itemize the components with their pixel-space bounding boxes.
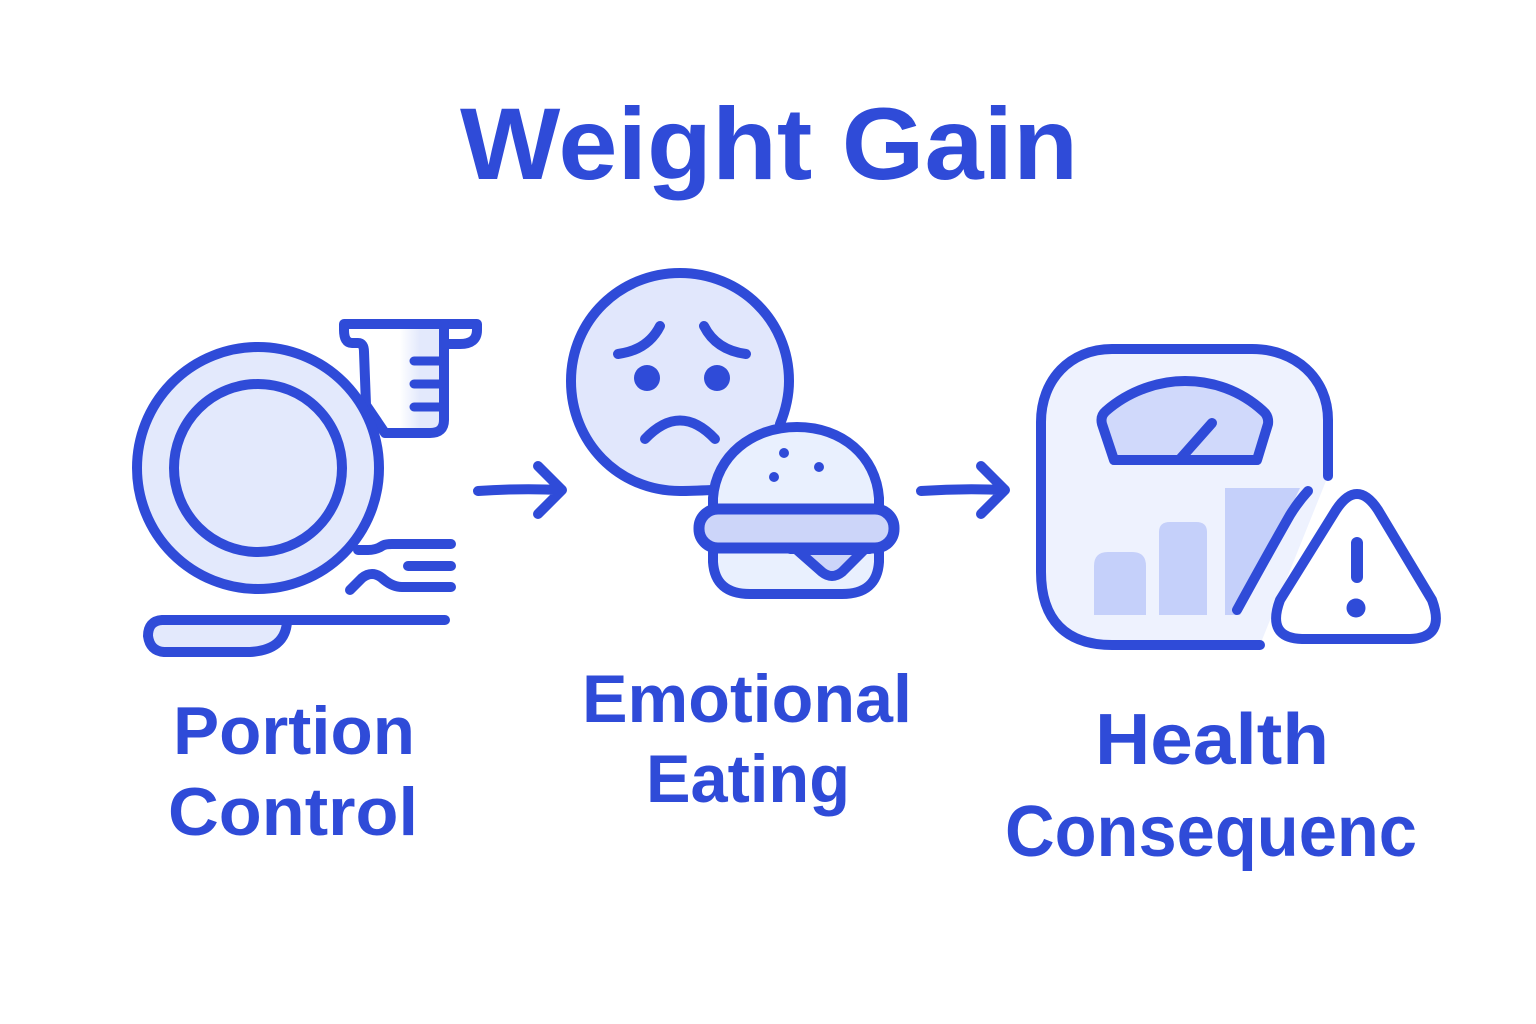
icon: plate: [137, 347, 379, 589]
label: Health Consequenc: [1005, 700, 1417, 872]
label: Health Consequenc: Health: [1095, 700, 1329, 780]
icon: burger: [699, 427, 894, 594]
icon: scale with warning: [1041, 349, 1436, 645]
icon: sad face: [571, 273, 789, 491]
label: Emotional Eating: [582, 661, 912, 817]
icon: knife: [148, 620, 445, 652]
arrow: emotional to health: [921, 466, 1005, 514]
title: Weight Gain: [460, 87, 1078, 201]
label: Portion Control: [168, 693, 418, 850]
icon: warning triangle: [1276, 494, 1436, 639]
label: Health Consequenc: Consequenc: [1005, 792, 1417, 872]
icon: sad face and burger: [571, 273, 894, 594]
label: Portion Control: Portion: [173, 693, 415, 769]
arrow: portion to emotional: [478, 466, 562, 514]
icon: fork: [350, 544, 451, 590]
icon: scale body: [1041, 349, 1328, 645]
bar chart: [1094, 488, 1300, 615]
label: Emotional Eating: Emotional: [582, 661, 912, 737]
label: Emotional Eating: Eating: [646, 741, 850, 817]
icon: measuring cup: [344, 324, 477, 433]
icon: scale dial: [1102, 381, 1268, 460]
label: Portion Control: Control: [168, 774, 418, 850]
icon: plate, measuring cup and cutlery: [137, 324, 477, 652]
